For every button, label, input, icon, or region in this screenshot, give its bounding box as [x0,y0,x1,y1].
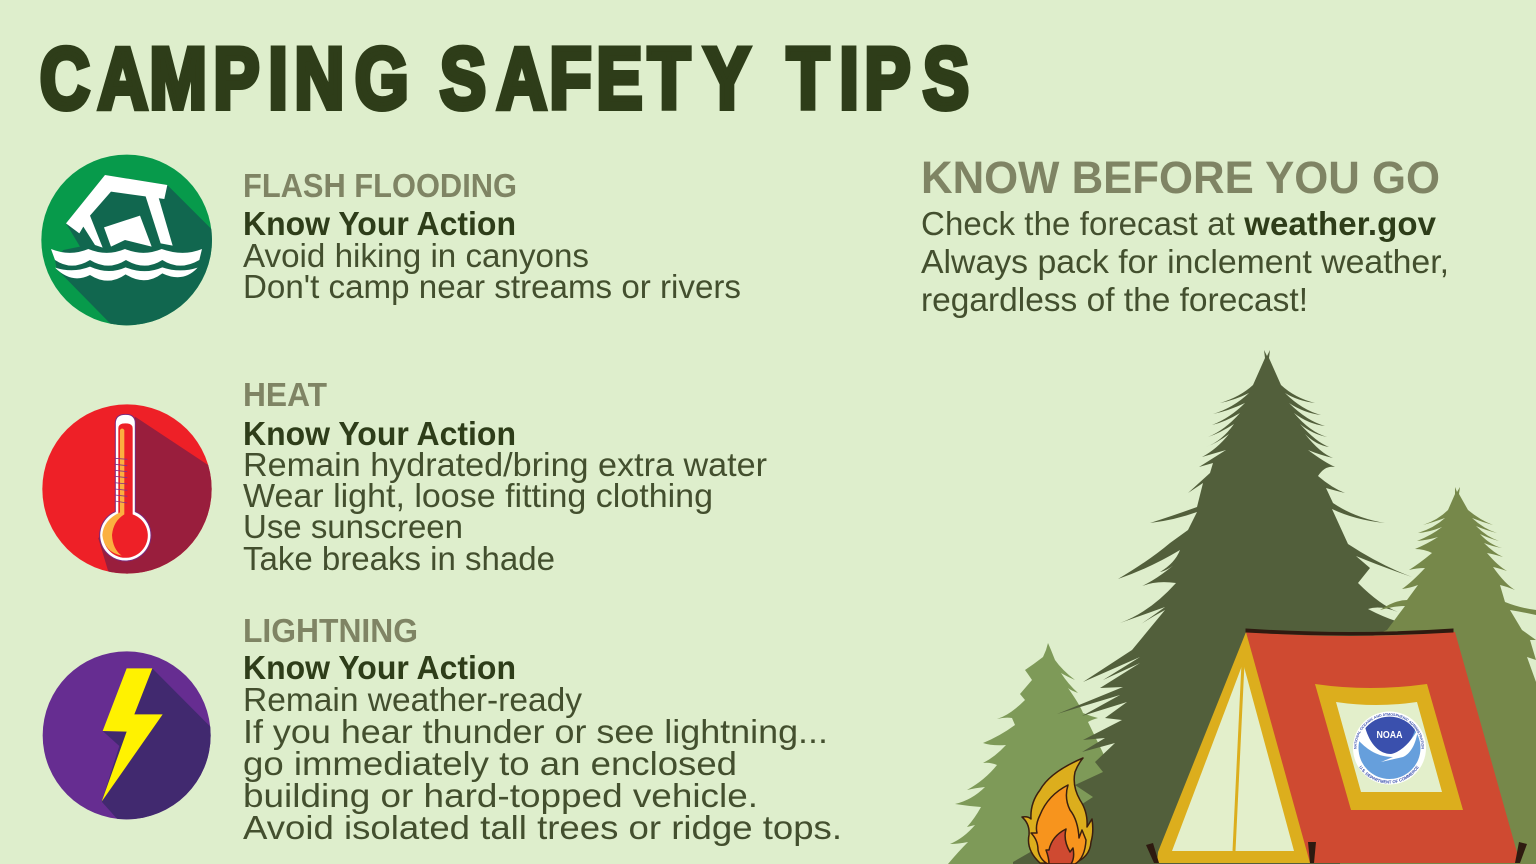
text: lightning: Know Your Action [243,649,516,686]
NOAA logo: NOAA [1376,730,1402,741]
NOAA logo: U.S. DEPARTMENT OF COMMERCE [1360,766,1419,784]
icon: thermometer [42,404,212,574]
text: lightning: building or hard-topped vehicle. [243,777,758,814]
icon: lightning bolt [42,651,211,820]
text: heat [243,376,767,577]
icon: campfire flame [1022,758,1093,864]
text: lightning [243,612,842,846]
text: flash flooding: FLASH FLOODING [243,167,517,204]
text: lightning: LIGHTNING [243,612,418,649]
text: heat: Know Your Action [243,415,516,452]
text: know before you go [921,152,1449,318]
title: CAMPING SAFETY TIPS [40,31,969,127]
text: know before you go: Always pack for inclement weather, [921,243,1449,280]
text: flash flooding: Know Your Action [243,205,516,242]
text: flash flooding: Don't camp near streams or rivers [243,268,741,305]
NOAA logo [1353,712,1426,784]
text: heat: HEAT [243,376,327,413]
icon: flash flooding house in water [41,154,212,326]
large pine tree [1013,350,1412,864]
text: know before you go: regardless of the forecast! [921,281,1308,318]
text: lightning: If you hear thunder or see lightning... [243,713,828,750]
text: flash flooding [243,167,741,305]
text: lightning: go immediately to an enclosed [243,745,737,782]
tent [1146,629,1527,863]
text: know before you go: Check the forecast at weather.gov [921,205,1437,242]
text: know before you go: KNOW BEFORE YOU GO [921,152,1440,203]
text: heat: Remain hydrated/bring extra water [243,446,767,483]
small pine tree [948,643,1115,864]
text: heat: Use sunscreen [243,508,463,545]
text: heat: Wear light, loose fitting clothing [243,477,713,514]
text: lightning: Avoid isolated tall trees or ridge tops. [243,809,842,846]
right pine tree [1340,487,1536,864]
NOAA logo: NATIONAL OCEANIC AND ATMOSPHERIC ADMINISTRATION [1354,713,1424,749]
text: heat: Take breaks in shade [243,540,555,577]
text: lightning: Remain weather-ready [243,681,582,718]
text: flash flooding: Avoid hiking in canyons [243,237,589,274]
